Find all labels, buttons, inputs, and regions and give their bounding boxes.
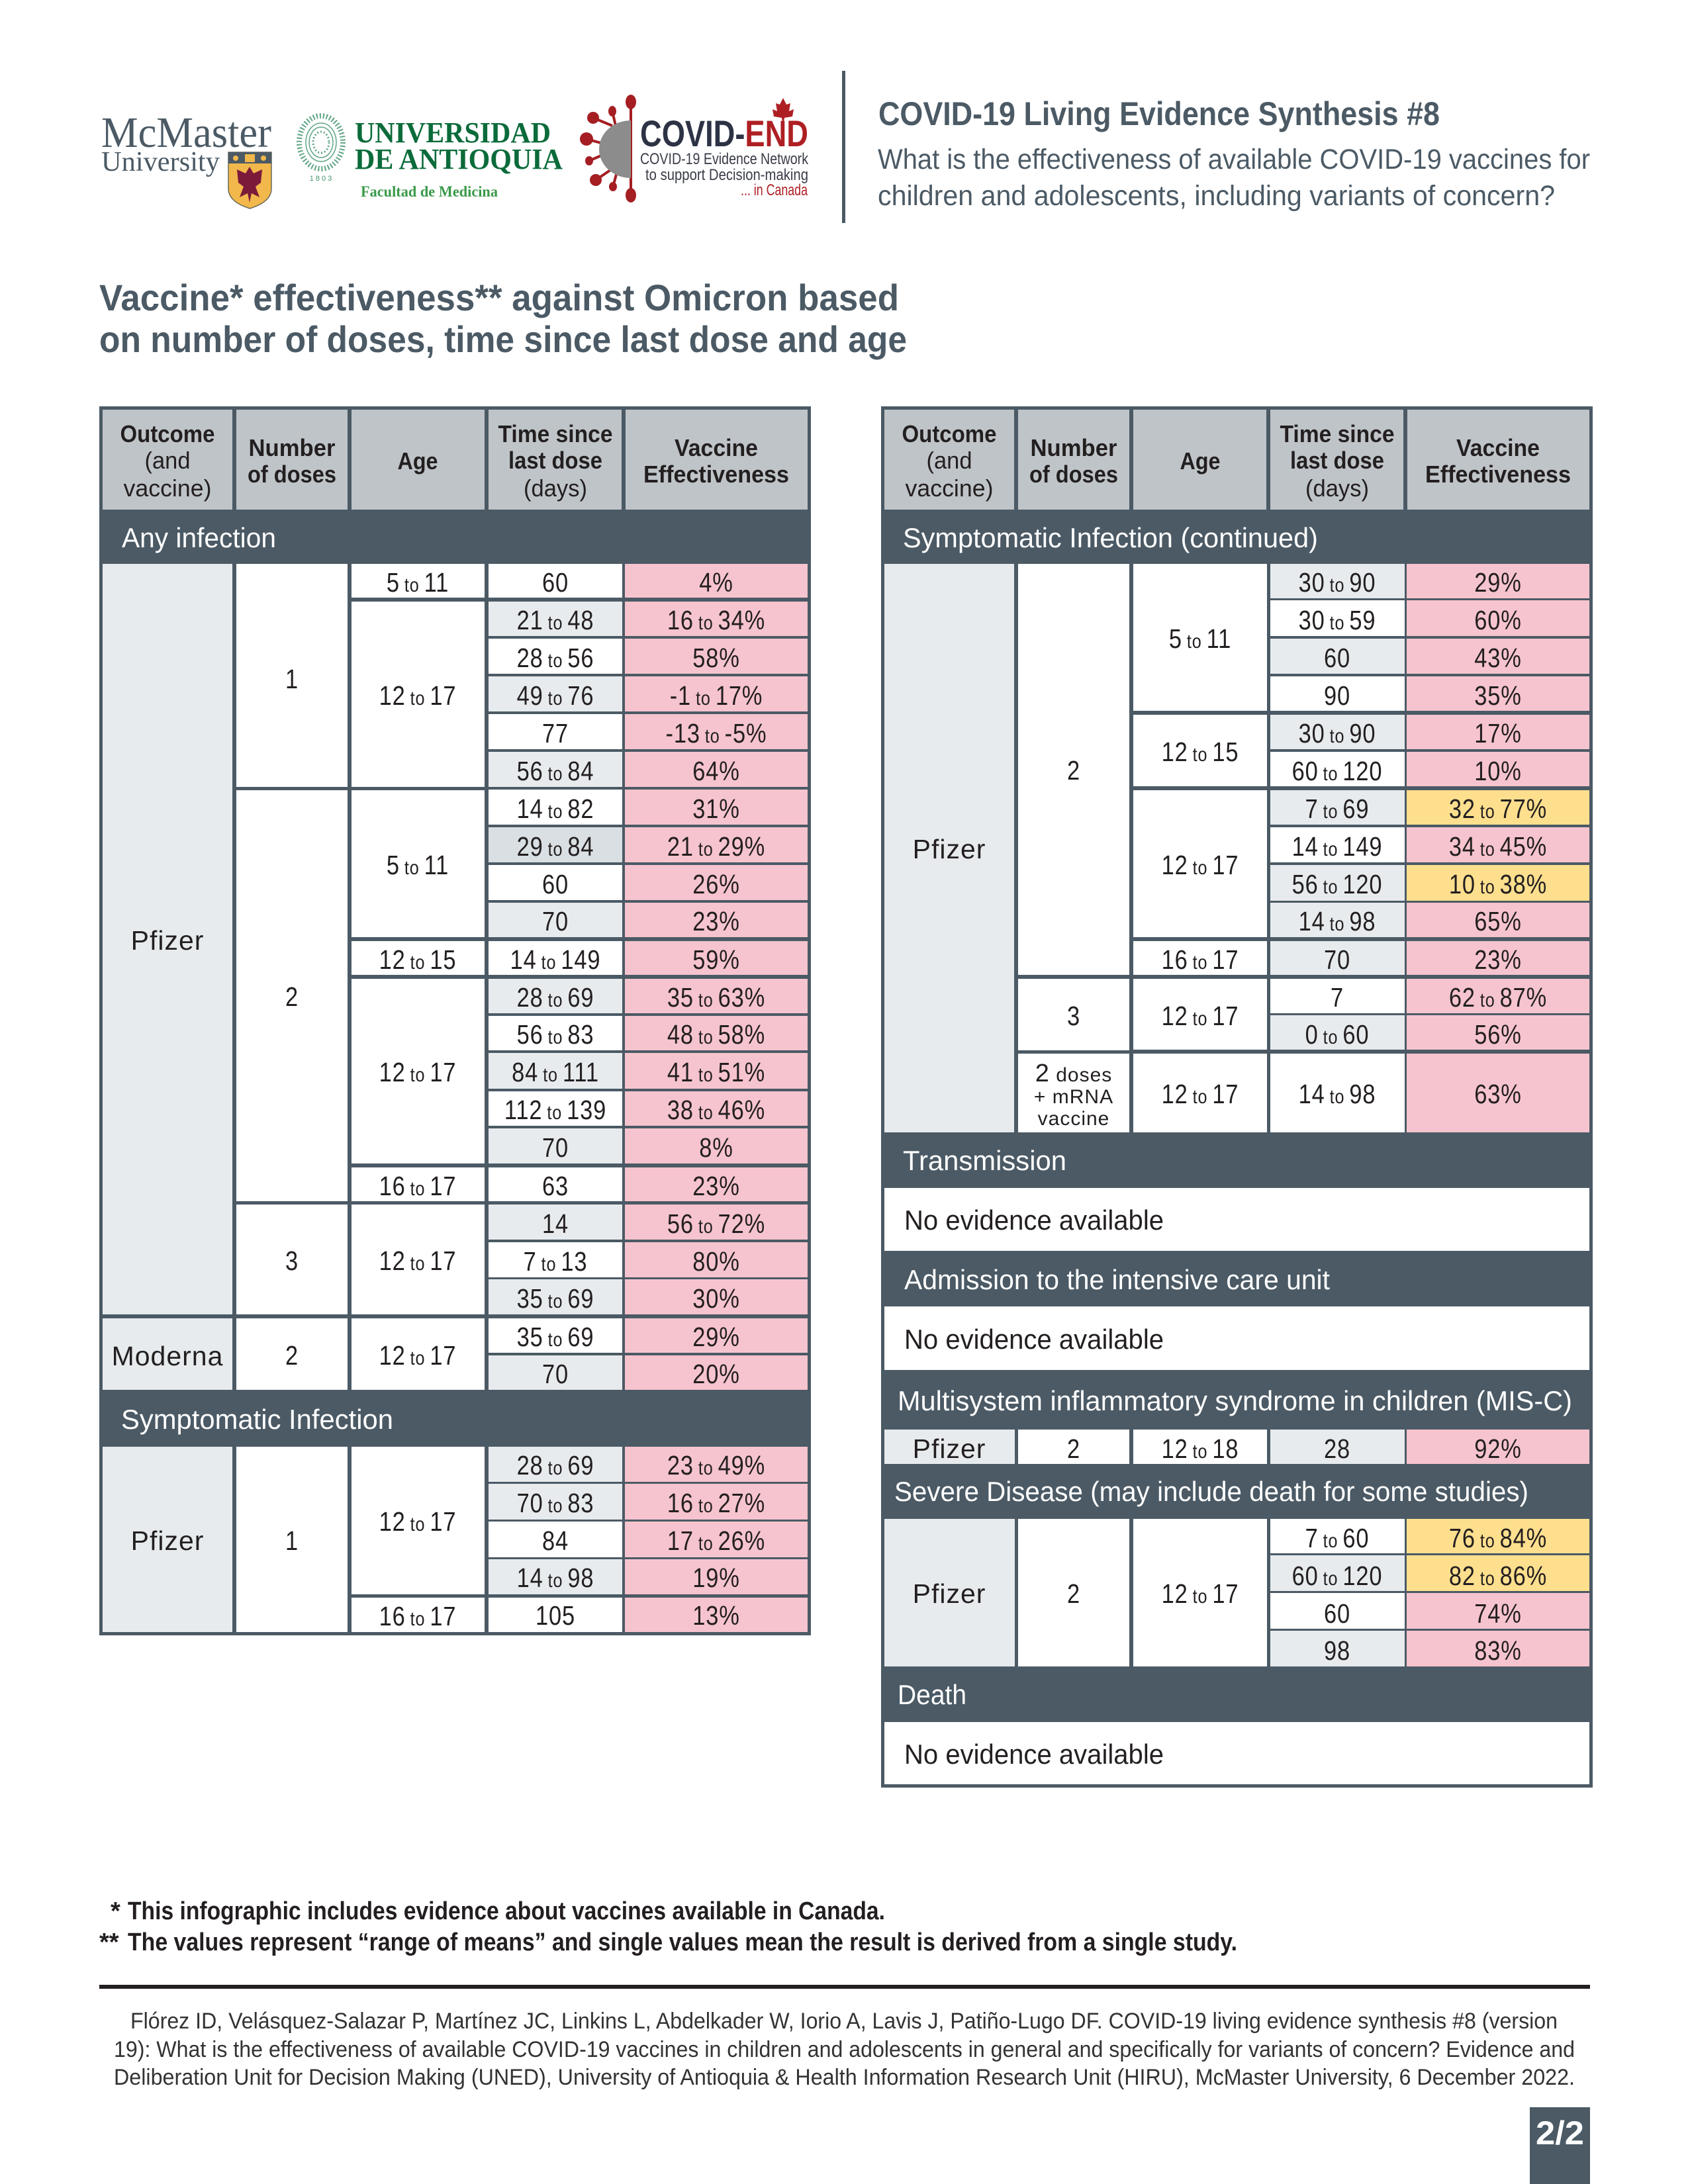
doses: Moderna 2: 2 [285, 1341, 299, 1371]
footnotes [99, 1897, 1237, 1956]
doses: 3 [236, 1205, 348, 1314]
time and effectiveness rows: 14 to 149 [1292, 832, 1382, 862]
time and effectiveness rows: any infection: 16 to 34% [667, 606, 765, 636]
time and effectiveness rows: any infection: 77 [542, 719, 569, 749]
section: transmission [884, 1145, 1589, 1251]
time and effectiveness rows: 29% [1474, 568, 1522, 598]
doses: 1: 1 [285, 664, 299, 695]
time and effectiveness rows: 32 to 77% [1449, 794, 1547, 825]
logo: COVID-END [580, 95, 809, 203]
header row: Age [397, 447, 438, 475]
header row [103, 410, 808, 510]
doses column [1018, 564, 1129, 1132]
time and effectiveness rows: any infection: 29% [692, 1322, 740, 1353]
age groups: 12 to 17 [379, 681, 456, 711]
header row: (days) [1305, 475, 1369, 502]
section: multisystem inflammatory syndrome: Pfizer [913, 1433, 986, 1464]
time and effectiveness rows: any infection: 31% [692, 794, 740, 825]
doses: 2 [236, 790, 348, 1201]
time and effectiveness rows: 23% [1474, 945, 1522, 976]
section: severe disease [884, 1476, 1589, 1666]
logo: COVID-END: to support Decision-making [645, 166, 808, 184]
time and effectiveness rows: any infection: 64% [692, 756, 740, 787]
time and effectiveness rows: any infection: 23% [692, 1171, 740, 1202]
section: severe disease: Pfizer [913, 1578, 986, 1609]
symptomatic rows: 17 to 26% [667, 1526, 765, 1557]
time and effectiveness rows: 30 to 59 [1299, 606, 1376, 636]
age groups: 16 to 17 [379, 1171, 456, 1202]
symptomatic rows: 12 to 17 [379, 1507, 456, 1537]
time and effectiveness rows: 34 to 45% [1449, 832, 1547, 862]
time and effectiveness rows: 30 to 90 [1299, 719, 1376, 749]
time and effectiveness rows: any infection: 48 to 58% [667, 1020, 765, 1050]
time and effectiveness rows: any infection: 49 to 76 [517, 681, 594, 711]
panel: left table [99, 406, 811, 1635]
age groups: 12 to 15 [379, 945, 456, 976]
section: severe disease: 76 to 84% [1449, 1524, 1547, 1554]
symptomatic rows [103, 1447, 808, 1632]
time and effectiveness rows: any infection: 63 [542, 1171, 569, 1202]
time and effectiveness rows: any infection: 35 to 69 [517, 1284, 594, 1314]
section: severe disease: 12 to 17 [1162, 1579, 1239, 1610]
header row: Outcome [902, 420, 997, 447]
age groups: 12 to 17 [1162, 850, 1239, 881]
age groups: 5 to 11 [387, 850, 449, 881]
time and effectiveness rows: any infection: 112 to 139 [504, 1095, 606, 1126]
time and effectiveness rows: 30 to 90 [1299, 568, 1376, 598]
age groups: 5 to 11 [1169, 624, 1231, 655]
header row: vaccine) [906, 475, 993, 502]
header row: Time since [498, 420, 613, 447]
main heading [99, 277, 907, 360]
doses column: 3 [1067, 1001, 1080, 1032]
section: severe disease: 2 [1067, 1579, 1080, 1610]
header row: Vaccine [675, 434, 758, 461]
time and effectiveness rows: 10 to 38% [1449, 870, 1547, 900]
header divider [842, 71, 845, 223]
age groups: 12 to 17 [379, 1246, 456, 1277]
doses column: vaccine [1038, 1108, 1109, 1130]
time and effectiveness rows: 63% [1474, 1079, 1522, 1110]
time and effectiveness rows: any infection: 35 to 69 [517, 1322, 594, 1353]
time and effectiveness rows: any infection: 29 to 84 [517, 832, 594, 862]
header row: of doses [1029, 461, 1118, 488]
time and effectiveness rows: any infection: 70 [542, 1133, 569, 1163]
time and effectiveness rows: any infection: 70 [542, 907, 569, 937]
logo: McMaster University [101, 109, 271, 208]
vaccine column: Moderna [103, 1318, 232, 1390]
time and effectiveness rows: any infection: 14 to 149 [510, 945, 600, 976]
section: death: No evidence available [904, 1739, 1164, 1770]
symptomatic rows: 105 [536, 1601, 575, 1631]
section: severe disease: 7 to 60 [1305, 1524, 1369, 1554]
section: multisystem inflammatory syndrome: 92% [1474, 1434, 1522, 1465]
age groups: 12 to 17 [1162, 1079, 1239, 1110]
time and effectiveness rows: any infection: 58% [692, 643, 740, 674]
doses column: + mRNA [1034, 1086, 1113, 1108]
time and effectiveness rows: any infection: 21 to 29% [667, 832, 765, 862]
section: severe disease: 82 to 86% [1449, 1561, 1547, 1592]
main heading: on number of doses, time since last dose and age [99, 318, 907, 360]
time and effectiveness rows: any infection: 30% [692, 1284, 740, 1314]
time and effectiveness rows: any infection: 26% [692, 870, 740, 900]
section: severe disease: 83% [1474, 1636, 1522, 1666]
logo: Universidad de Antioquia [299, 116, 563, 200]
time and effectiveness rows: 62 to 87% [1449, 983, 1547, 1013]
symptomatic rows: Pfizer [131, 1525, 204, 1556]
time and effectiveness rows: any infection: -13 to -5% [666, 719, 767, 749]
time and effectiveness rows: 35% [1474, 681, 1522, 711]
header row: Vaccine [1456, 434, 1540, 461]
section: severe disease: 60 to 120 [1292, 1561, 1382, 1592]
section: admission to the intensive care unit: No evidence available [904, 1324, 1164, 1355]
time and effectiveness rows: 14 to 98 [1299, 907, 1376, 937]
main heading: Vaccine* effectiveness** against Omicron based [99, 277, 899, 318]
time and effectiveness rows: any infection: 8% [699, 1133, 733, 1163]
time and effectiveness rows: 0 to 60 [1305, 1020, 1369, 1050]
age groups: 16 to 17 [1162, 945, 1239, 976]
footnotes: * [111, 1897, 120, 1925]
time and effectiveness rows: any infection: 28 to 69 [517, 983, 594, 1013]
doses: 1 [236, 564, 348, 787]
logo: McMaster University: McMaster [101, 109, 271, 157]
time and effectiveness rows: any infection: 56 to 83 [517, 1020, 594, 1050]
doses: 2: 2 [285, 982, 299, 1013]
time and effectiveness rows: any infection: 21 to 48 [517, 606, 594, 636]
symptomatic rows: 23 to 49% [667, 1451, 765, 1481]
time and effectiveness rows: any infection: 14 [542, 1209, 569, 1240]
section: severe disease: Severe Disease (may include death for some studies) [894, 1476, 1528, 1507]
time and effectiveness rows: 14 to 98 [1299, 1079, 1376, 1110]
age groups: 5 to 11 [387, 568, 449, 598]
time and effectiveness rows: 56 to 120 [1292, 870, 1382, 900]
age groups [1133, 564, 1267, 1132]
age groups: 12 to 15 [1162, 737, 1239, 768]
time and effectiveness rows: 60 to 120 [1292, 756, 1382, 787]
symptomatic rows: 1 [285, 1526, 299, 1557]
header row: Outcome [120, 420, 214, 447]
section: admission to the intensive care unit [884, 1264, 1589, 1370]
section: multisystem inflammatory syndrome: 28 [1324, 1434, 1350, 1465]
time and effectiveness rows: 56% [1474, 1020, 1522, 1050]
doses column: 2 doses [1035, 1060, 1112, 1087]
panel: right table [881, 406, 1593, 1788]
vaccine column: Pfizer [884, 564, 1014, 1132]
logo: Universidad de Antioquia: UNIVERSIDAD [355, 116, 551, 149]
time and effectiveness rows: any infection: 7 to 13 [524, 1247, 587, 1277]
doses column: 2 [1067, 756, 1080, 786]
section: severe disease: 60 [1324, 1599, 1350, 1629]
vaccine column: Pfizer: Pfizer [131, 925, 204, 956]
page number: 2/2 [1536, 2115, 1584, 2152]
age groups: 12 to 17 [379, 1341, 456, 1371]
section band: symptomatic infection: Symptomatic Infection [121, 1404, 393, 1435]
logo: COVID-END: COVID-END [640, 113, 808, 154]
header text: synthesis title and question [878, 95, 1590, 212]
header row: of doses [248, 461, 336, 488]
footnotes: ** [99, 1929, 119, 1956]
footnotes: This infographic includes evidence about vaccines available in Canada. [128, 1897, 885, 1925]
time and effectiveness rows: any infection: 14 to 82 [517, 794, 594, 825]
time and effectiveness rows: any infection: 28 to 56 [517, 643, 594, 674]
age groups [352, 564, 485, 1390]
header row: last dose [508, 447, 602, 474]
section: death [884, 1679, 1589, 1784]
time and effectiveness rows: 17% [1474, 719, 1522, 749]
section: transmission: Transmission [903, 1145, 1066, 1176]
logo: COVID-END: ... in Canada [741, 181, 808, 199]
symptomatic rows: 84 [542, 1526, 569, 1557]
citation: Flórez ID, Velásquez-Salazar P, Martínez JC, Linkins L, Abdelkader W, Iorio A, Lavis J, Patiño-Lugo DF. COVID-19 living evidence synthesis #8 (version [130, 2009, 1558, 2034]
symptomatic rows: 14 to 98 [517, 1563, 594, 1594]
symptomatic rows: 16 to 27% [667, 1488, 765, 1519]
time and effectiveness rows: any infection: 56 to 72% [667, 1209, 765, 1240]
logo: McMaster University: University [101, 147, 220, 177]
time and effectiveness rows: 60% [1474, 606, 1522, 636]
time and effectiveness rows: any infection: 59% [692, 945, 740, 976]
age groups: 12 to 17 [1162, 1001, 1239, 1032]
time and effectiveness rows: any infection: 56 to 84 [517, 756, 594, 787]
symptomatic rows: 16 to 17 [379, 1602, 456, 1632]
time and effectiveness rows [1270, 564, 1589, 1132]
time and effectiveness rows: 90 [1324, 681, 1350, 711]
header row: vaccine) [123, 475, 212, 502]
time and effectiveness rows: any infection: 60 [542, 568, 569, 598]
symptomatic rows: 28 to 69 [517, 1451, 594, 1481]
section: severe disease: 74% [1474, 1599, 1522, 1629]
time and effectiveness rows: any infection [489, 564, 808, 1390]
header text: synthesis title and question: What is the effectiveness of available COVID-19 vaccines for [878, 144, 1590, 175]
section: transmission: No evidence available [904, 1205, 1164, 1236]
page number [1530, 2107, 1590, 2184]
time and effectiveness rows: any infection: 84 to 111 [512, 1058, 599, 1088]
header row: (and [144, 447, 191, 474]
vaccine column: Pfizer: Pfizer [913, 834, 986, 864]
header row: Effectiveness [1425, 461, 1571, 488]
time and effectiveness rows: 7 [1331, 983, 1344, 1013]
logo: COVID-END: COVID-19 Evidence Network [640, 150, 809, 168]
time and effectiveness rows: any infection: 80% [692, 1247, 740, 1277]
header row: Number [1030, 434, 1117, 461]
time and effectiveness rows: 70 [1324, 945, 1350, 976]
time and effectiveness rows: any infection: 70 [542, 1359, 569, 1390]
time and effectiveness rows: any infection: 23% [692, 907, 740, 937]
time and effectiveness rows: any infection: 35 to 63% [667, 983, 765, 1013]
age groups: 12 to 17 [379, 1058, 456, 1088]
time and effectiveness rows: 60 [1324, 643, 1350, 674]
logo: Universidad de Antioquia: DE ANTIOQUIA [355, 143, 563, 175]
section: multisystem inflammatory syndrome: 12 to 18 [1162, 1434, 1239, 1465]
vaccine column: Moderna: Moderna [112, 1341, 223, 1371]
section band: symptomatic infection continued: Symptomatic Infection (continued) [903, 522, 1318, 553]
section: severe disease: 98 [1324, 1636, 1350, 1666]
citation: Deliberation Unit for Decision Making (UNED), University of Antioquia & Health Information Research Unit (HIRU), McMaster University, 6 December 2022. [114, 2065, 1575, 2090]
vaccine column: Pfizer [103, 564, 232, 1314]
section: admission to the intensive care unit: Admission to the intensive care unit [904, 1264, 1330, 1295]
footer divider [99, 1985, 1590, 1989]
section band: any infection: Any infection [122, 522, 276, 553]
time and effectiveness rows: any infection: 4% [699, 568, 733, 598]
time and effectiveness rows: any infection: -1 to 17% [670, 681, 763, 711]
section: multisystem inflammatory syndrome: 2 [1067, 1434, 1080, 1465]
time and effectiveness rows: any infection: 60 [542, 870, 569, 900]
header row: (and [927, 447, 972, 474]
doses: 3: 3 [285, 1246, 299, 1277]
header row [884, 410, 1589, 510]
section: multisystem inflammatory syndrome [884, 1385, 1589, 1465]
citation [114, 2009, 1575, 2090]
logo: Universidad de Antioquia: Facultad de Medicina [361, 183, 498, 200]
header row: Age [1180, 447, 1221, 475]
header row: last dose [1290, 447, 1384, 474]
time and effectiveness rows: any infection: 38 to 46% [667, 1095, 765, 1126]
footnotes: The values represent “range of means” and single values mean the result is derived from a single study. [128, 1929, 1237, 1956]
time and effectiveness rows: 65% [1474, 907, 1522, 937]
header row: Number [249, 434, 335, 461]
section: death: Death [898, 1679, 966, 1710]
doses: Moderna 2 [236, 1318, 348, 1390]
symptomatic rows: 13% [692, 1601, 740, 1631]
header row: (days) [524, 475, 587, 502]
header row: Effectiveness [643, 461, 789, 488]
logo: Universidad de Antioquia: 1803 [310, 175, 334, 183]
symptomatic rows: 70 to 83 [517, 1488, 594, 1519]
time and effectiveness rows: 43% [1474, 643, 1522, 674]
header row: Time since [1280, 420, 1394, 447]
citation: 19): What is the effectiveness of available COVID-19 vaccines in children and adolescents in general and specifically for variants of concern? Evidence and [114, 2037, 1575, 2062]
section: multisystem inflammatory syndrome: Multisystem inflammatory syndrome in children (MIS-C) [898, 1385, 1572, 1416]
time and effectiveness rows: any infection: 20% [692, 1359, 740, 1390]
symptomatic rows: 19% [692, 1563, 740, 1594]
header text: synthesis title and question: children and adolescents, including variants of concern? [878, 180, 1555, 212]
time and effectiveness rows: 10% [1474, 756, 1522, 787]
header text: synthesis title and question: COVID-19 Living Evidence Synthesis #8 [878, 95, 1440, 132]
time and effectiveness rows: 7 to 69 [1305, 794, 1369, 825]
time and effectiveness rows: any infection: 41 to 51% [667, 1058, 765, 1088]
